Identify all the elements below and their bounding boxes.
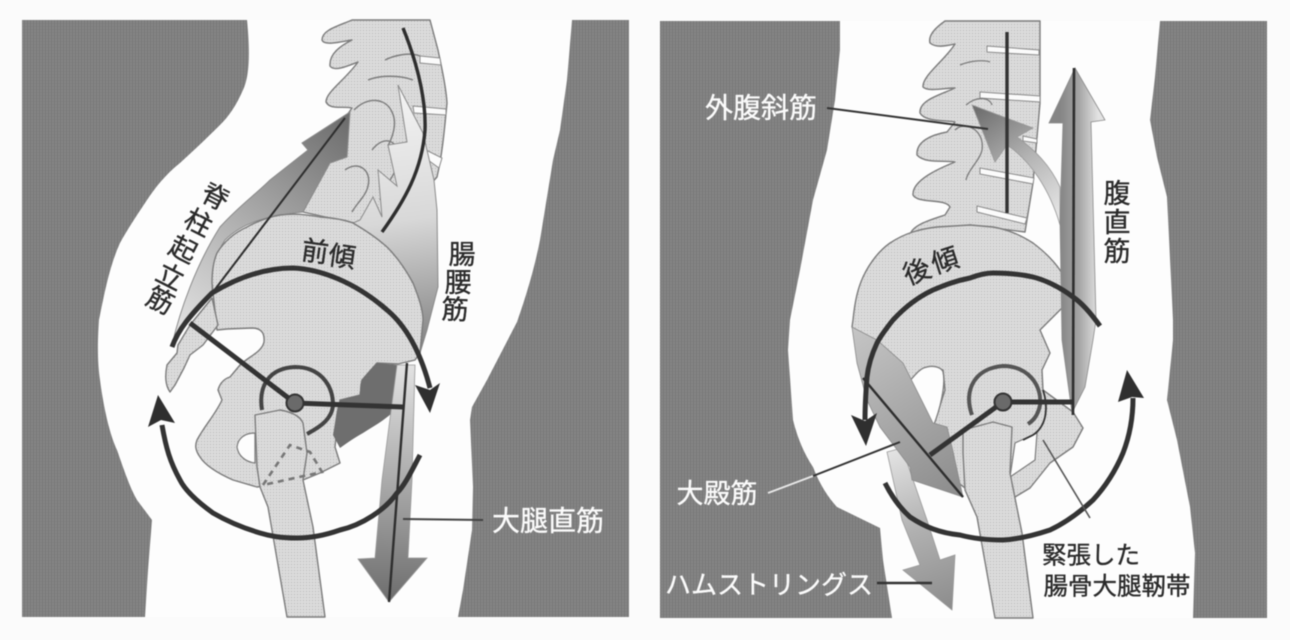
panel: posterior pelvic tilt [660,21,1267,618]
hip joint [190,323,403,434]
spine: lumbar vertebrae [303,20,447,230]
iliofemoral ligament: small curve [1023,390,1046,440]
label: 後傾: 傾 [928,243,962,279]
label: 腸腰筋 [441,240,476,326]
label: 脊柱起立筋: 柱 [179,204,217,242]
label: 腸腰筋: 腸 [448,240,476,270]
label: 腸腰筋: 腰 [444,268,472,298]
label: 腹直筋: 直 [1104,208,1130,238]
sacrum and coccyx [166,298,218,392]
muscle arrow: external oblique (外腹斜筋) [972,105,1060,225]
label: ハムストリングス: ハムストリングス [665,570,873,600]
label: 脊柱起立筋: 脊 [196,178,234,216]
force line: gluteus [863,378,963,497]
label: 緊張した腸骨大腿靭帯: 腸骨大腿靭帯 [1044,572,1190,600]
label: 前傾 [300,235,357,274]
label: 前傾: 傾 [327,240,357,274]
rotation arrow: upper arc [851,273,1100,446]
label: 腹直筋 [1104,179,1130,267]
obturator hole [237,433,255,463]
spine curve line [382,28,425,232]
label: 大殿筋: 大殿筋 [676,479,758,509]
label: 外腹斜筋: 外腹斜筋 [705,92,817,124]
panel: anterior pelvic tilt [22,20,629,617]
label: 脊柱起立筋: 立 [151,258,189,296]
label: 後傾 [899,243,962,291]
sciatic notch [908,366,944,427]
label: 緊張した腸骨大腿靭帯: 緊張した [1042,542,1140,570]
rotation arrow: lower arc [885,370,1144,540]
obturator hole [1010,433,1037,477]
label: 大殿筋 [676,442,900,509]
label: 脊柱起立筋: 筋 [141,282,179,320]
label: 腹直筋: 筋 [1104,237,1130,267]
label: 脊柱起立筋 [141,178,234,320]
femur [255,410,325,617]
hip joint [930,366,1072,455]
muscle arrow: erector spinae (脊柱起立筋) [172,112,350,345]
ligament: dashed triangle [263,445,322,485]
background: dark surround [22,20,629,617]
rotation arrow: lower arc [148,395,420,538]
force line: rectus abdominis [1073,68,1074,415]
femur [963,422,1033,618]
label: 大腿直筋: 大腿直筋 [492,506,604,536]
body silhouette [788,21,1195,618]
muscle arrow: gluteus maximus (大殿筋) [852,327,963,497]
rotation arrow: upper arc [172,268,440,413]
muscle arrow: hamstrings [887,448,955,610]
force line: erector spinae [213,118,345,292]
spine axis line [1005,32,1009,213]
pelvis: ilium and ischium [196,214,423,487]
label: 緊張した腸骨大腿靭帯 [1042,440,1190,600]
muscle arrow: rectus femoris (大腿直筋) [358,365,427,602]
label: 脊柱起立筋: 起 [164,231,202,269]
force line: rectus femoris [389,363,407,602]
pelvis: ilium and ischium [852,225,1083,497]
spine: lumbar vertebrae [910,21,1040,235]
label: 腸腰筋: 筋 [441,294,469,326]
background: dark surround [660,21,1267,618]
muscle: iliopsoas (腸腰筋) [353,85,438,353]
label: 前傾: 前 [300,235,330,269]
label: 腹直筋: 腹 [1104,179,1130,209]
muscle arrow: rectus abdominis (腹直筋) [1049,68,1105,413]
body silhouette [98,20,572,617]
muscle: dark anterior hip region [333,363,398,448]
label: 外腹斜筋 [705,92,988,129]
label: 後傾: 後 [899,253,935,291]
